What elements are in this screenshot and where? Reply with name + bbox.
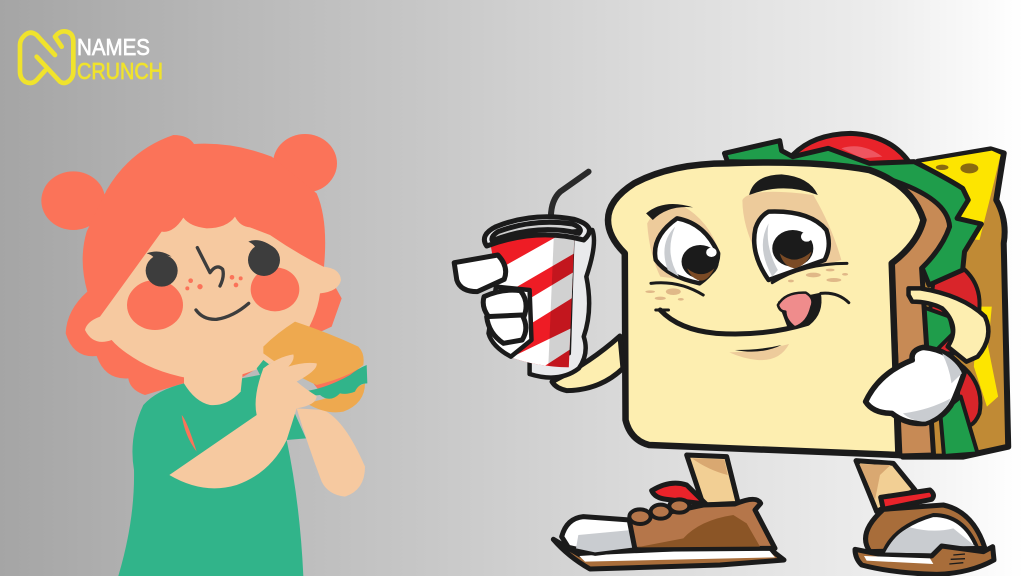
- tongue: [778, 293, 813, 327]
- bread crust side: [875, 175, 950, 456]
- sandwich tomato: [313, 368, 360, 392]
- left shoe toe: [562, 517, 635, 553]
- arm right: [909, 288, 988, 362]
- right shoe: [855, 490, 994, 574]
- icon: N monogram: [20, 31, 73, 83]
- cup clear back: [530, 230, 594, 378]
- lettuce top and side: [724, 141, 981, 285]
- right leg: [856, 461, 915, 512]
- left eye shade: [647, 206, 720, 280]
- lettuce lower: [922, 307, 978, 456]
- left leg: [687, 455, 738, 505]
- cup glove: [454, 255, 531, 357]
- sandwich mascot: [454, 133, 1008, 457]
- sandwich top bun: [263, 322, 364, 385]
- far arm: [297, 408, 365, 497]
- glove palm: [489, 287, 531, 357]
- chin shade: [729, 344, 789, 360]
- girl neck: [184, 367, 243, 405]
- left shoe tongue: [652, 483, 706, 504]
- logo: Names Crunch: [20, 31, 163, 84]
- tomato side: [925, 253, 980, 353]
- girl shirt: [118, 374, 306, 576]
- sandwich held: [257, 322, 367, 412]
- cheese holes: [936, 163, 978, 173]
- right shoe tongue: [881, 490, 933, 509]
- cup body stripes: [491, 237, 574, 368]
- girl eyes: [146, 240, 280, 287]
- near arm and hand: [169, 354, 317, 488]
- left shoe laces: [629, 499, 689, 524]
- girl nose and mouth: [196, 248, 249, 319]
- left shoe upper: [629, 499, 775, 549]
- legs and shoes: [553, 455, 994, 574]
- right shoe sole: [855, 546, 994, 574]
- back bread and cheese: [892, 149, 1008, 457]
- tomato top: [793, 133, 911, 167]
- cheese top: [920, 151, 1001, 240]
- girl face: [85, 217, 341, 382]
- right shoe upper: [866, 505, 985, 552]
- right eye: [754, 212, 847, 283]
- glove thumb: [454, 255, 506, 292]
- sandwich lower bun: [307, 383, 365, 412]
- right shoe tread: [949, 554, 965, 564]
- freckles: [185, 275, 243, 290]
- logo word: CRUNCH: CRUNCH: [77, 58, 163, 84]
- girl hair: [41, 134, 342, 395]
- cup lid: [484, 217, 589, 246]
- sandwich lettuce: [300, 365, 367, 399]
- arm left: [552, 336, 623, 391]
- left shoe sole white: [579, 547, 775, 562]
- left brow: [646, 204, 693, 220]
- drinking cup: [484, 172, 594, 378]
- blush cheeks: [127, 267, 299, 330]
- left shoe sole: [553, 539, 784, 569]
- straw: [551, 172, 589, 217]
- sandwich green edge: [257, 360, 270, 376]
- right brow: [749, 174, 818, 195]
- cheese lower drip: [974, 307, 998, 407]
- left shoe: [553, 483, 784, 569]
- logo word: NAMES: NAMES: [77, 34, 150, 60]
- mouth opening: [778, 293, 822, 327]
- tomato lower: [957, 363, 980, 427]
- eye shades: [647, 192, 841, 280]
- glove right: [866, 347, 965, 424]
- girl eating sandwich: [41, 134, 367, 576]
- smile: [660, 310, 808, 334]
- left eye: [651, 218, 719, 295]
- right shoe white toe: [883, 515, 977, 555]
- shirt red slash: [182, 415, 197, 452]
- freckles: [645, 269, 848, 301]
- bread front: [608, 162, 923, 455]
- right eye shade: [742, 192, 841, 280]
